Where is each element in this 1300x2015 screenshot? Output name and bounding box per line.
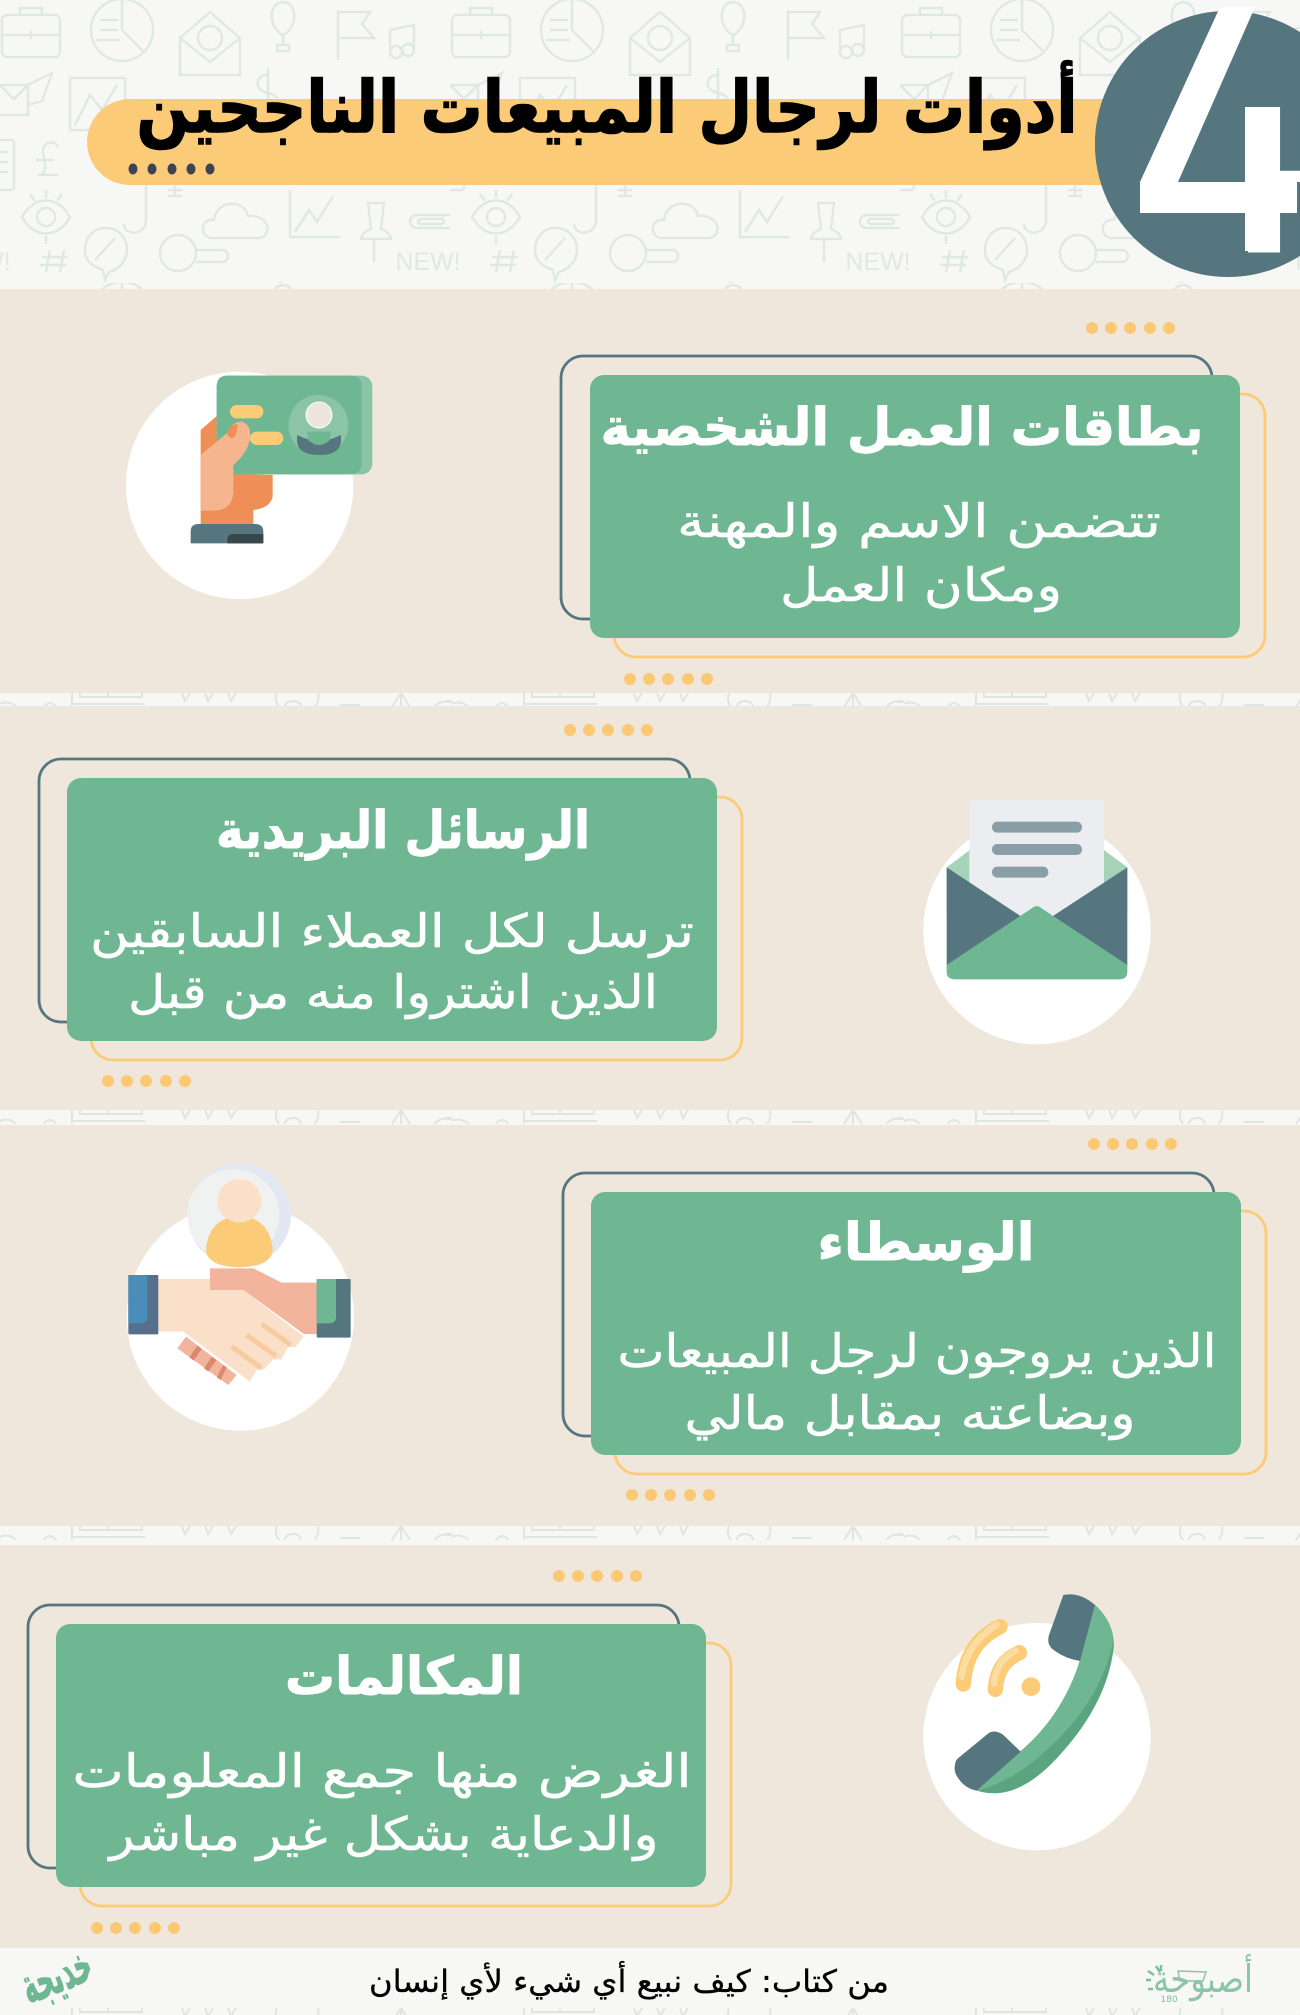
icon: business card in hand [126, 372, 372, 599]
icon: phone [923, 1594, 1151, 1850]
logo: right: 180 [1160, 1995, 1178, 2005]
logo: right: أصبوحة [1153, 1954, 1253, 2002]
section band: mail [0, 706, 1300, 1110]
panel: mail [39, 724, 742, 1087]
logo: left: خديجة [12, 1935, 100, 2015]
separator strips [0, 693, 1300, 2015]
body text: ترسل لكل العملاء السابقين [90, 904, 694, 959]
heading: المكالمات [285, 1647, 523, 1707]
icon: open envelope [923, 800, 1151, 1044]
title bar [87, 99, 1160, 185]
heading: الرسائل البريدية [216, 801, 590, 861]
header [87, 7, 1300, 277]
title dots [128, 164, 214, 174]
panel: business cards [561, 322, 1265, 685]
panel: brokers: وبضاعته بمقابل مالي [684, 1386, 1136, 1441]
section band: business cards [0, 289, 1300, 693]
title: أدوات لرجال المبيعات الناجحين [136, 60, 1078, 150]
body text: تتضمن الاسم والمهنة [677, 494, 1161, 549]
panel: brokers [563, 1138, 1266, 1501]
body text: الذين يروجون لرجل المبيعات [618, 1324, 1216, 1379]
heading: بطاقات العمل الشخصية [600, 398, 1204, 458]
section band: calls [0, 1545, 1300, 1948]
body text: الغرض منها جمع المعلومات [72, 1744, 692, 1799]
icon: handshake [127, 1163, 354, 1431]
panel: mail: الذين اشتروا منه من قبل [128, 965, 658, 1020]
footer [0, 1935, 1300, 2015]
panel: calls: والدعاية بشكل غير مباشر [107, 1807, 659, 1862]
panel: business cards: ومكان العمل [780, 558, 1062, 613]
heading: الوسطاء [818, 1213, 1034, 1273]
section band: brokers [0, 1125, 1300, 1526]
panel: calls [28, 1570, 731, 1934]
source note: من كتاب: كيف نبيع أي شيء لأي إنسان [369, 1961, 889, 2000]
